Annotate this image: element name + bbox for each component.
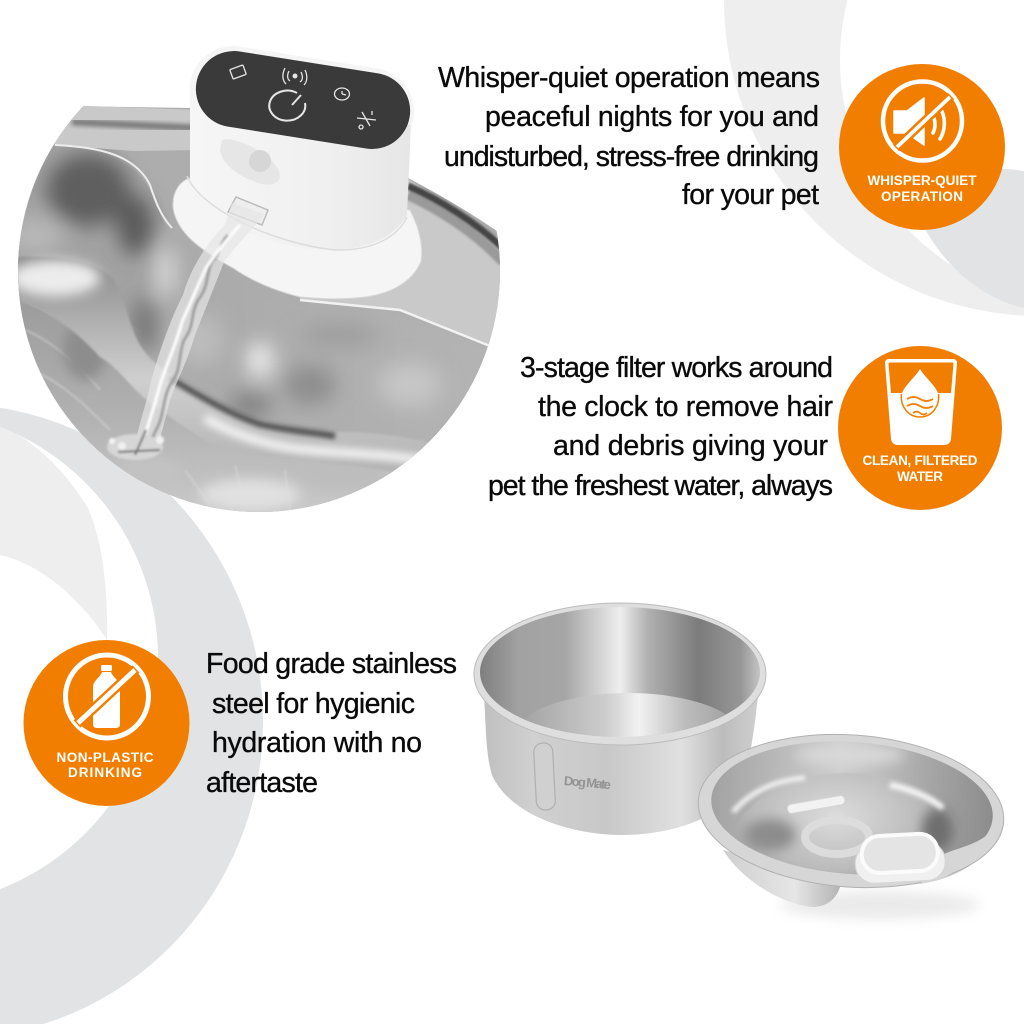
badge: non-plastic drinking: NON-PLASTIC (56, 750, 154, 765)
text: stainless steel: Food grade stainless (206, 648, 457, 680)
water stream (137, 203, 258, 438)
bowl rim (474, 603, 766, 745)
sensor dome (249, 150, 271, 172)
sensor recess (220, 139, 280, 185)
deck bright edge (300, 300, 500, 350)
plate dome (736, 774, 932, 874)
flange (173, 178, 422, 299)
control panel (196, 51, 410, 149)
panel icons (230, 65, 376, 129)
badge: whisper-quiet operation: WHISPER-QUIET (868, 173, 977, 188)
plate underbelly (723, 850, 842, 907)
badge: whisper-quiet operation: OPERATION (881, 189, 963, 204)
badge: clean, filtered water: WATER (897, 469, 943, 484)
text: filter: and debris giving your (553, 430, 828, 462)
wall shadows and reflections (5, 154, 442, 417)
text: filter: the clock to remove hair (538, 391, 834, 423)
tab (787, 795, 845, 814)
text: filter (488, 352, 834, 502)
text: whisper-quiet: for your pet (682, 179, 819, 211)
background: top-right circles (724, 0, 1024, 316)
badge: clean, filtered water (838, 346, 1002, 510)
badge: clean, filtered water: CLEAN, FILTERED (862, 453, 978, 468)
right deck (300, 180, 510, 352)
inner rim line (55, 145, 172, 228)
splash (107, 430, 164, 460)
bowl interior (480, 607, 760, 737)
left basin wall (18, 146, 162, 311)
text: whisper-quiet: undisturbed, stress-free drinking (444, 141, 819, 173)
text: filter: pet the freshest water, always (488, 470, 833, 502)
upper rim streak (72, 122, 195, 128)
curved bowl lip (15, 257, 440, 480)
dome bright arc left (733, 778, 805, 812)
centre ring (805, 820, 869, 854)
text: whisper-quiet: peaceful nights for you and (485, 101, 819, 133)
spout (228, 197, 268, 225)
plate lower-right rim (920, 834, 988, 884)
middle wall (422, 346, 488, 448)
water ripples (26, 330, 286, 486)
lip bright band (205, 418, 430, 462)
plate rim (693, 725, 1009, 897)
pump body (190, 90, 411, 250)
right rim band (408, 195, 503, 262)
badge: non-plastic drinking: DRINKING (68, 765, 142, 780)
level window (533, 743, 556, 810)
upper rim band (55, 105, 200, 151)
pump lower collar line (187, 176, 407, 250)
text: stainless steel: hydration with no (212, 727, 422, 759)
dome dark right (922, 808, 954, 852)
icon: crossed bottle (77, 665, 136, 728)
text: whisper-quiet: Whisper-quiet operation means (438, 62, 820, 94)
plate wall highlight (795, 745, 905, 765)
water surface (20, 300, 386, 512)
plate shadow (780, 891, 980, 919)
bowl floor (524, 693, 726, 737)
text: stainless steel: steel for hygienic (212, 688, 415, 720)
badge: whisper-quiet operation (839, 64, 1005, 230)
icon: muted speaker (894, 96, 951, 148)
photo: stainless plate with collar (693, 725, 1009, 919)
white collar (854, 833, 946, 884)
lip dark edge (170, 378, 335, 436)
lip highlight, upper left (10, 260, 100, 296)
bowl body (484, 695, 758, 835)
logo: Dog Mate (563, 773, 612, 792)
background: left circles (0, 404, 263, 1024)
text: stainless steel: aftertaste (206, 767, 318, 799)
dome bright arc right (890, 785, 943, 808)
plate under right (900, 835, 995, 885)
right rim dark line (408, 186, 503, 248)
photo: stainless bowl (474, 603, 766, 835)
photo: fountain pump and stainless bowl (18, 46, 500, 512)
water highlights (58, 330, 300, 512)
icon: glass with water drop (885, 359, 957, 445)
stream swirls (142, 225, 240, 455)
text: filter: 3-stage filter works around (520, 352, 833, 384)
plate interior (707, 732, 997, 884)
dome dark left (744, 819, 796, 851)
badge: non-plastic drinking (24, 640, 190, 806)
text: whisper-quiet (438, 62, 820, 211)
pump cap (190, 46, 414, 126)
text: stainless steel (206, 648, 457, 799)
